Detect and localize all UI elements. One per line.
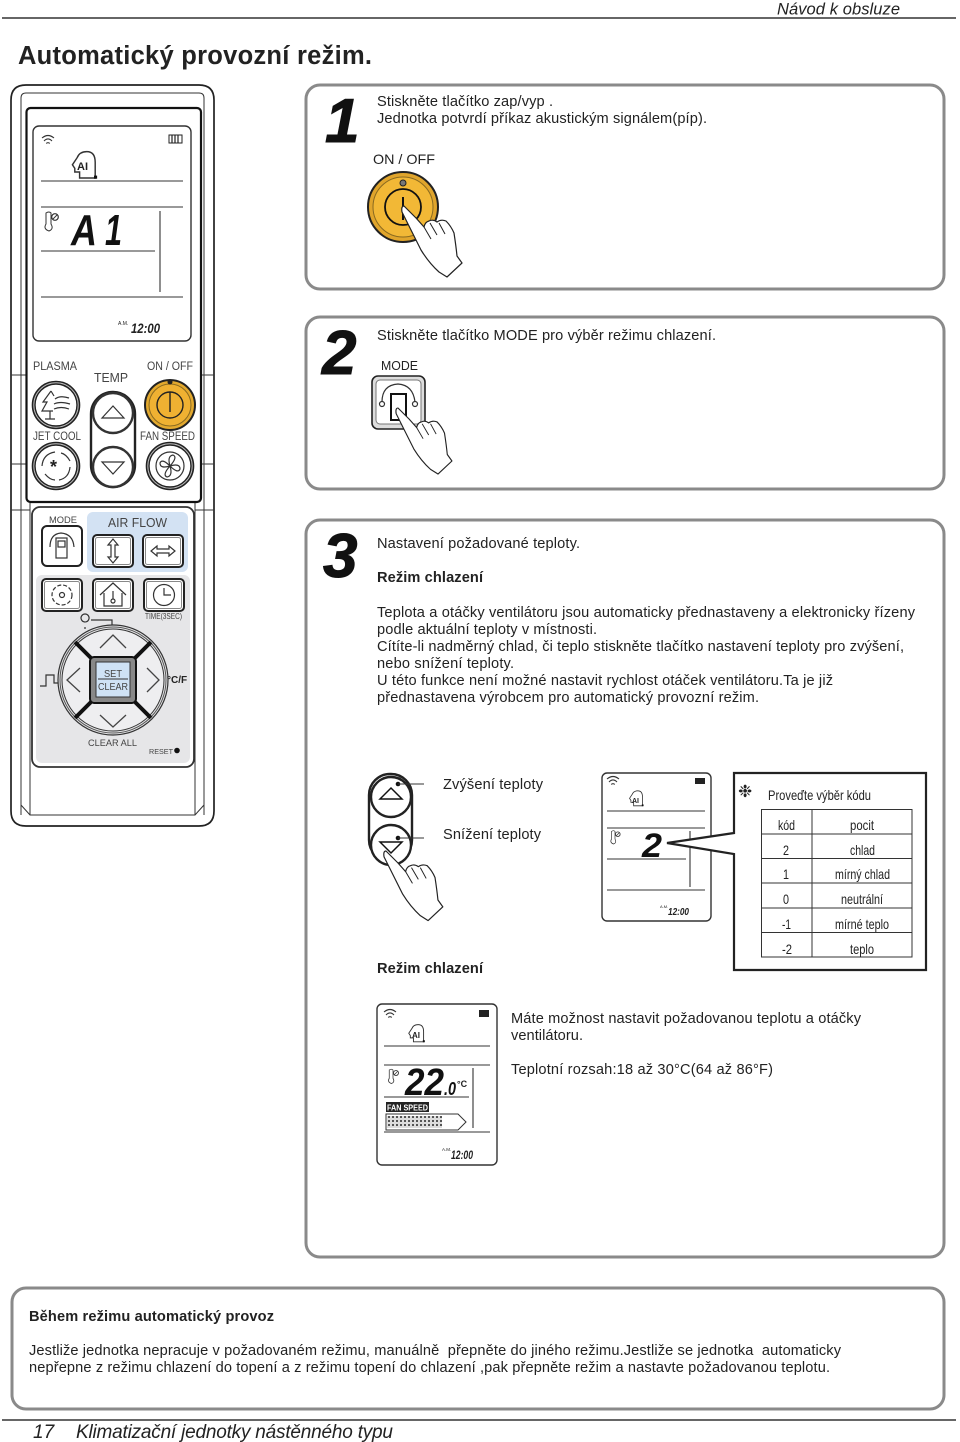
step 3 instructions: U této funkce není možné nastavit rychlost otáček ventilátoru.Ta je již (377, 673, 833, 689)
LCD: cooling code: A.M. (660, 904, 668, 909)
table (761, 809, 912, 957)
table: 2 (783, 842, 789, 858)
step number 1: 1 (325, 87, 359, 156)
icon: light (81, 614, 112, 629)
upper button labels (33, 361, 195, 443)
upper button labels: FAN SPEED (140, 431, 195, 443)
LCD: set temperature and fan speed: °C (457, 1079, 468, 1089)
button: on/off (145, 380, 195, 430)
remote LCD screen: 12:00 (131, 320, 160, 336)
footer: page number and section (2, 1420, 956, 1442)
button: temperature rocker (91, 392, 135, 487)
table: -1 (782, 916, 791, 932)
icon: snowflake: ❉ (738, 782, 752, 801)
title: Automatický provozní režim. (18, 42, 372, 70)
button: jet cool (32, 442, 80, 490)
panel: automatic mode note: Během režimu automatický provoz (29, 1309, 274, 1325)
table: mírné teplo (835, 916, 889, 932)
LCD: cooling code: AI (632, 798, 639, 805)
panel: remote control (11, 85, 214, 826)
lower control panel: CLEAR ALL (88, 738, 137, 749)
upper button labels: PLASMA (33, 361, 77, 373)
panel: automatic mode note: Jestliže jednotka nepracuje v požadovaném režimu, manuálně přepněte do jiného režimu.Jestliže se jednotka automaticky (29, 1343, 842, 1359)
lower control panel: °C/F (167, 675, 187, 686)
step 2 text: Stiskněte tlačítko MODE pro výběr režimu chlazení. (377, 328, 716, 344)
lower control panel: MODE (49, 515, 77, 526)
LCD: set temperature and fan speed (377, 1004, 497, 1165)
step number 2: 2 (321, 319, 356, 388)
lower control panel: AIR FLOW (108, 516, 167, 530)
panel: step 1 (306, 85, 944, 289)
lower control panel: RESET (149, 747, 173, 756)
table: chlad (850, 842, 875, 858)
callout: code selection table: Proveďte výběr kódu (768, 787, 871, 803)
step 1 text (377, 94, 707, 127)
step 3 instructions: Teplota a otáčky ventilátoru jsou automaticky přednastaveny a elektronicky řízeny (377, 605, 916, 621)
LCD: cooling code: 12:00 (668, 907, 689, 918)
table: mírný chlad (835, 866, 890, 882)
step number 3: 3 (323, 522, 357, 591)
remote LCD screen: AI (77, 161, 88, 173)
step 3 instructions: Nastavení požadované teploty. (377, 536, 580, 552)
LCD: set temperature and fan speed: AI (412, 1031, 420, 1040)
button: jet cool: * (50, 457, 57, 477)
table: teplo (850, 941, 874, 957)
directional dial: CLEAR (98, 682, 128, 693)
button: home temperature (93, 579, 133, 611)
text: temperature range (511, 1011, 862, 1078)
icon: mode button with hand (372, 376, 452, 474)
step 1 text: Stiskněte tlačítko zap/vyp . (377, 94, 553, 110)
label: temperature down: Snížení teploty (443, 827, 542, 843)
table: -2 (782, 941, 792, 957)
button: settings (42, 579, 82, 611)
lower control panel: TIME(3SEC) (145, 612, 182, 621)
table: 1 (783, 866, 789, 882)
panel: automatic mode note (12, 1288, 944, 1409)
step 1 text: Jednotka potvrdí příkaz akustickým signálem(píp). (377, 111, 707, 127)
LCD: set temperature and fan speed: 22 (404, 1062, 444, 1104)
remote LCD screen: 1 (105, 206, 122, 255)
button: plasma (32, 382, 80, 428)
table: pocit (850, 817, 874, 833)
button: horizontal air flow (143, 535, 183, 567)
heading: cooling mode: Režim chlazení (377, 961, 484, 977)
directional dial: SET (104, 669, 122, 680)
directional dial (58, 625, 168, 735)
LCD: cooling code (602, 773, 711, 921)
step 3 instructions: nebo snížení teploty. (377, 656, 514, 672)
remote LCD screen: A (70, 206, 97, 255)
LCD: set temperature and fan speed: A.M. (442, 1147, 451, 1152)
lower control panel (32, 507, 194, 767)
upper button labels: TEMP (94, 371, 128, 385)
LCD: set temperature and fan speed: .0 (444, 1079, 456, 1099)
button: vertical air flow (93, 535, 133, 567)
LCD: cooling code: 2 (641, 827, 662, 865)
icon: temperature buttons with hand (369, 774, 443, 921)
LCD: set temperature and fan speed: 12:00 (451, 1150, 473, 1162)
remote LCD screen (33, 126, 191, 341)
text: temperature range: Teplotní rozsah:18 až 30°C(64 až 86°F) (511, 1062, 773, 1078)
panel: step 3 (306, 520, 944, 1257)
step 3 instructions: Režim chlazení (377, 570, 484, 586)
panel: step 2 (306, 317, 944, 489)
button: timer (144, 579, 184, 611)
table: neutrální (841, 891, 883, 907)
LCD: set temperature and fan speed: FAN SPEED (387, 1102, 428, 1112)
step 3 instructions: Cítíte-li nadměrný chlad, či teplo stiskněte tlačítko nastavení teploty pro zvýšení, (377, 639, 904, 655)
upper button labels: ON / OFF (147, 361, 193, 373)
remote LCD screen: A.M. (118, 321, 128, 327)
header: manual title: Návod k obsluze (777, 0, 900, 18)
label: on/off: ON / OFF (373, 151, 435, 167)
step 3 instructions: přednastavena výrobcem pro automatický provozní režim. (377, 690, 759, 706)
icon: lock (40, 675, 58, 686)
table: 0 (783, 891, 789, 907)
upper button labels: JET COOL (33, 431, 82, 443)
panel: automatic mode note: nepřepne z režimu chlazení do topení a z režimu topení do chlazení ,pak přepněte režim a nastavte požadovanou teplotu. (29, 1360, 830, 1376)
step 3 instructions: podle aktuální teploty v místnosti. (377, 622, 597, 638)
text: temperature range: Máte možnost nastavit požadovanou teplotu a otáčky (511, 1011, 862, 1027)
label: temperature up: Zvýšení teploty (443, 777, 544, 793)
icon: on/off button with hand (368, 172, 462, 277)
step 3 instructions (377, 536, 916, 706)
callout: code selection table (667, 773, 926, 970)
label: mode: MODE (381, 358, 418, 373)
text: temperature range: ventilátoru. (511, 1028, 583, 1044)
button: mode (42, 526, 82, 566)
button: fan speed (146, 442, 194, 490)
table: kód (778, 817, 795, 833)
